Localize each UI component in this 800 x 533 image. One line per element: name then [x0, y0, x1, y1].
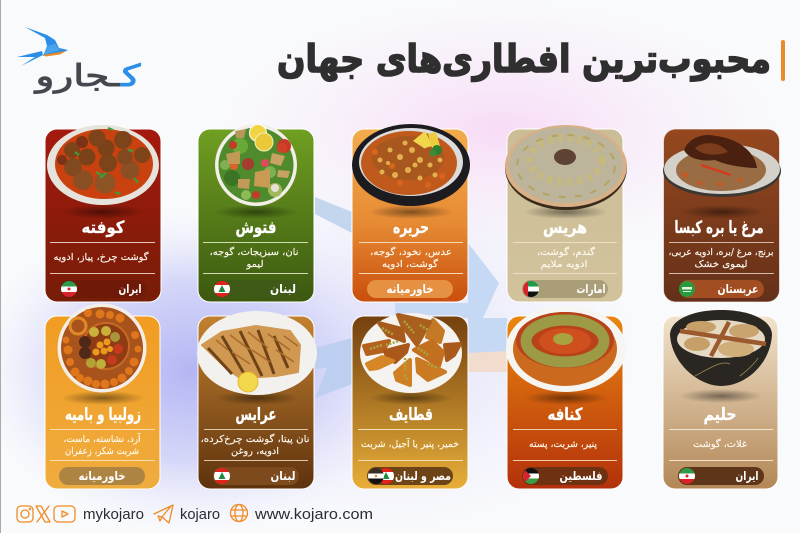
handle: mykojaro: mykojaro [83, 506, 144, 523]
ingredients: پنیر، شربت، پسته [529, 439, 597, 450]
food: arayes plate [197, 311, 317, 395]
country pill: فلسطین [560, 469, 602, 483]
icon: telegram [154, 505, 173, 523]
ingredients: شربت شکر، زعفران [65, 446, 139, 457]
ingredients [668, 247, 774, 270]
card background [507, 129, 623, 302]
food shadow [369, 391, 453, 405]
food: haleem bowl [670, 310, 772, 386]
dividers [513, 242, 617, 274]
dividers [669, 242, 774, 274]
dish name: حریره [393, 218, 429, 238]
panel: haleem [663, 310, 778, 489]
footer social links [17, 504, 373, 523]
ingredients: گوشت چرخ، پیاز، ادویه [54, 251, 149, 263]
region pill [367, 280, 453, 298]
food: zolbia and bamieh plate [58, 304, 146, 392]
food shadow [369, 205, 453, 219]
panel: harees [505, 125, 627, 302]
ingredients: نان، سبزیجات، گوجه، [210, 246, 298, 258]
flag: Lebanon [214, 281, 230, 297]
country pill: امارات [576, 282, 606, 296]
flag: UAE [523, 281, 539, 297]
country pill: لبنان [270, 469, 296, 483]
food: qatayef plate [360, 313, 462, 393]
icon: globe [230, 504, 248, 522]
dividers [358, 430, 463, 460]
food shadow [680, 205, 764, 219]
panel: zolbia [45, 304, 160, 489]
panel: fattoush [198, 124, 314, 302]
title accent bar [781, 40, 785, 81]
icon: X [36, 506, 50, 522]
ingredients [210, 246, 298, 270]
flag: Saudi Arabia [679, 281, 695, 297]
dish name: حلیم [704, 405, 736, 425]
food: fattoush salad [215, 124, 297, 206]
panel: arayes [197, 311, 317, 489]
food shadow [215, 391, 299, 405]
ingredients [370, 246, 452, 270]
panel: kabsa [663, 129, 781, 302]
food: kabsa plate [663, 135, 781, 197]
icon: youtube [54, 506, 75, 522]
dish name: کوفته [82, 218, 125, 238]
region pill: خاورمیانه [386, 282, 434, 297]
dish name: کنافه [548, 405, 583, 425]
country pill: مصر و لبنان [395, 469, 451, 484]
card background [45, 316, 160, 489]
ingredients: آرد، نشاسته، ماست، [64, 432, 141, 445]
ingredients: نان پیتا، گوشت چرخ‌کرده، [200, 433, 310, 445]
card background [352, 316, 468, 489]
dish name: زولبیا و بامیه [65, 405, 141, 425]
ingredients: ادویه، روغن [231, 446, 279, 457]
dividers [513, 430, 617, 460]
country pill: لبنان [270, 282, 296, 296]
card background [507, 316, 623, 489]
icon: instagram [17, 506, 33, 522]
ingredients [64, 432, 141, 457]
card background [45, 129, 161, 302]
flag: Palestine [523, 468, 539, 484]
food shadow [214, 205, 298, 219]
dividers [359, 242, 463, 274]
ingredients: گندم، گوشت، [537, 246, 595, 258]
card background [198, 316, 314, 489]
region pill [59, 467, 145, 485]
website: www.kojaro.com [254, 506, 373, 523]
ingredients [200, 433, 310, 457]
flag: Iran [61, 281, 77, 297]
country pill: ایران [736, 469, 758, 483]
food shadow [61, 391, 145, 405]
food: kunafa plate [506, 306, 626, 392]
flag: Egypt [368, 468, 384, 484]
ingredients: برنج، مرغ /بره، ادویه عربی، [668, 247, 774, 258]
flag: Lebanon [381, 468, 394, 484]
panel: qatayef [352, 313, 468, 489]
panel: kunafa [506, 306, 626, 489]
food: harira soup bowl [352, 124, 470, 206]
food shadow [524, 391, 608, 405]
food: kofta plate [47, 125, 159, 205]
handle: kojaro: kojaro [180, 506, 220, 523]
dish name: هریس [543, 218, 587, 238]
ingredients: ادویه ملایم [540, 259, 588, 270]
card background [198, 129, 314, 302]
ingredients: خمیر، پنیر یا آجیل، شربت [361, 437, 459, 450]
ingredients [537, 246, 595, 270]
dish name: عرایس [236, 405, 276, 425]
ingredients: لیموی خشک [694, 259, 748, 270]
icon: swallow bird [17, 27, 68, 66]
region pill: خاورمیانه [78, 469, 126, 484]
country pill [214, 281, 296, 297]
country pill [522, 280, 608, 298]
card background [663, 316, 778, 489]
country pill [679, 280, 764, 298]
dividers [203, 242, 308, 274]
dividers [669, 430, 773, 460]
logo [17, 27, 141, 94]
country pill [522, 467, 608, 485]
dividers [204, 430, 308, 460]
ingredients: عدس، نخود، گوجه، [370, 246, 452, 258]
food: harees dish [505, 125, 627, 210]
country pill [60, 280, 146, 298]
food shadow [61, 205, 145, 219]
panel: harira [352, 124, 470, 302]
country pill [213, 467, 299, 485]
card background [352, 129, 468, 302]
ingredients: گوشت، ادویه [382, 258, 439, 270]
country pill [678, 467, 764, 485]
dividers [50, 242, 155, 274]
dish name: قطایف [389, 405, 433, 425]
food shadow [679, 389, 763, 403]
country pill [367, 467, 453, 485]
ingredients: غلات، گوشت [693, 438, 747, 450]
country pill: ایران [118, 282, 142, 296]
flag: Iran [679, 468, 695, 484]
dish name: فتوش [236, 218, 276, 238]
card background [664, 129, 780, 302]
country pill: عربستان [718, 282, 758, 296]
ingredients: لیمو [245, 259, 264, 270]
logo wordmark: کـجارو [33, 59, 141, 94]
dividers [50, 430, 155, 460]
panel: kofta [45, 125, 161, 302]
food shadow [524, 205, 608, 219]
flag: Lebanon [214, 468, 230, 484]
